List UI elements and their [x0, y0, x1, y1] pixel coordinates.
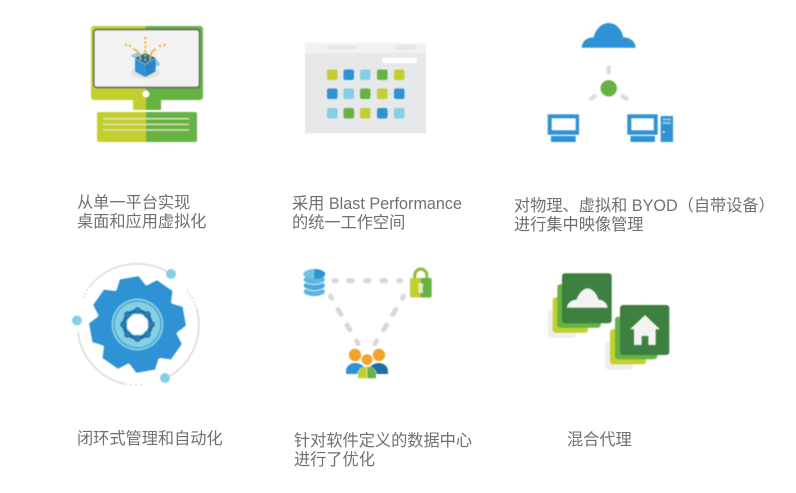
text: software-defined data center: 针对软件定义的数据中心: [294, 432, 472, 450]
icon: database, lock and users triangle: [303, 269, 432, 378]
text: single platform: [77, 194, 206, 231]
text: closed-loop management: 闭环式管理和自动化: [77, 430, 223, 448]
text: Blast Performance workspace: 采用 Blast Performance: [292, 195, 462, 213]
icon: hybrid agents cloud and home stacks: [548, 273, 669, 369]
text: centralized image management: [514, 197, 775, 234]
text: Blast Performance workspace: 的统一工作空间: [292, 214, 405, 232]
text: software-defined data center: [294, 432, 472, 469]
text: hybrid agent: 混合代理: [567, 431, 632, 449]
text: centralized image management: 进行集中映像管理: [514, 216, 644, 234]
icon: monitor with box: [91, 26, 203, 142]
text: single platform: 桌面和应用虚拟化: [77, 213, 206, 231]
text: single platform: 从单一平台实现: [77, 194, 190, 212]
icon: workspace grid: [305, 43, 426, 134]
text: software-defined data center: 进行了优化: [294, 451, 375, 469]
text: Blast Performance workspace: [292, 195, 462, 232]
icon: cloud and devices network: [548, 23, 673, 142]
icon: gear with orbit: [72, 264, 199, 385]
text: centralized image management: 对物理、虚拟和 BYOD（自带设备）: [514, 197, 775, 215]
